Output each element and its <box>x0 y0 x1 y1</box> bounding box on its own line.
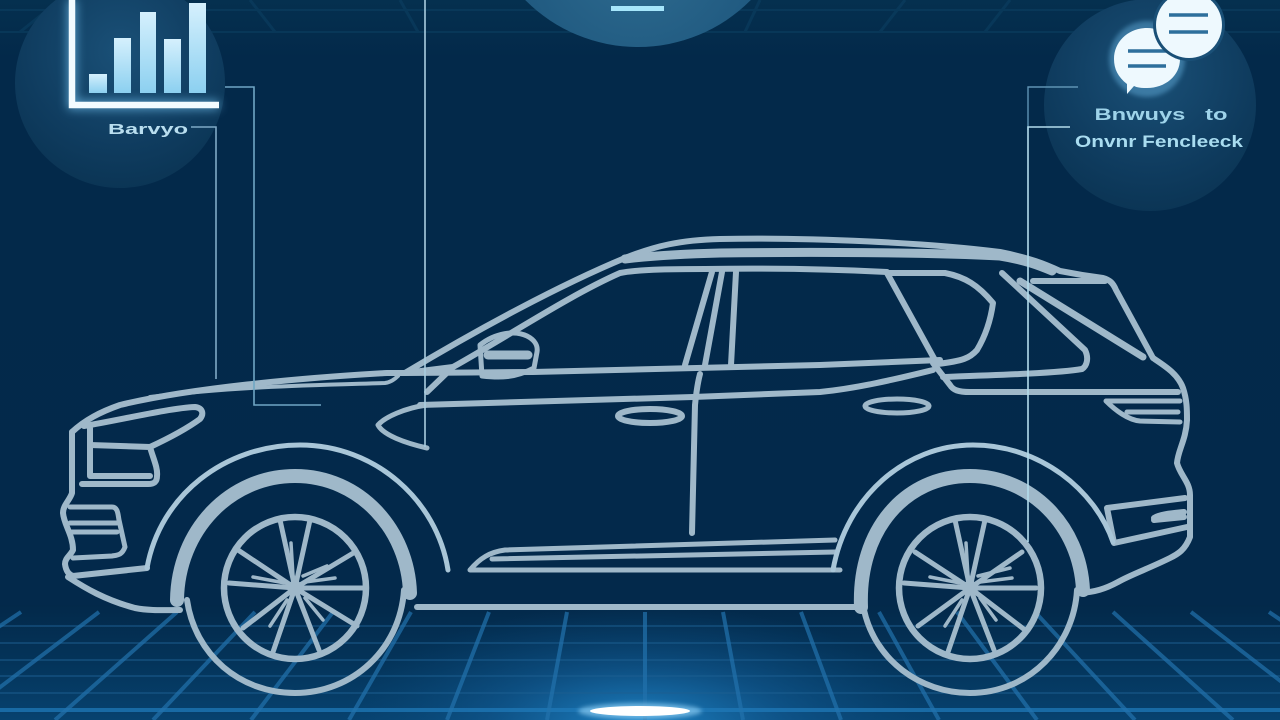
top grid pattern <box>0 0 1280 32</box>
icon: bar chart <box>72 0 219 105</box>
panel: feedback circle <box>1044 0 1256 211</box>
side sill <box>417 604 860 610</box>
roof and body top <box>405 239 1190 593</box>
headlight <box>82 407 202 484</box>
rear arch <box>833 445 1113 570</box>
door seam <box>692 374 700 533</box>
mid belt line <box>420 370 933 405</box>
front tyre <box>187 590 404 693</box>
mirror lozenge <box>378 405 427 448</box>
rear fender <box>861 476 1083 607</box>
front fender <box>177 476 410 600</box>
icon: dash <box>611 6 664 11</box>
leader line: survey label <box>191 127 216 379</box>
leader line: feedback lower <box>1028 127 1070 542</box>
rear bumper <box>1107 498 1187 543</box>
icon: chat bubbles <box>1109 0 1225 97</box>
floor spotlight <box>578 703 702 719</box>
label: feedback line 1: Bnwuys to <box>1094 105 1228 124</box>
floor grid <box>0 605 1280 720</box>
front face and grille <box>63 432 147 576</box>
pillars and windows <box>685 272 736 365</box>
door handles <box>618 409 682 423</box>
panel: top circle <box>479 0 797 47</box>
leader line: feedback upper <box>1028 87 1078 130</box>
label: survey: Barvyo <box>108 122 188 138</box>
leader line: chart <box>225 87 321 405</box>
side mirror <box>480 333 537 377</box>
rear light <box>1106 401 1180 422</box>
rear tyre <box>864 590 1077 693</box>
hood <box>72 360 940 432</box>
front wheel <box>224 517 366 659</box>
rear wheel <box>899 517 1041 659</box>
front arch <box>147 445 448 570</box>
car outline <box>63 239 1190 693</box>
panel: survey circle <box>15 0 225 188</box>
leader line: top circle <box>424 0 426 447</box>
label: feedback line 2: Onvnr Fencleeck <box>1075 132 1244 151</box>
